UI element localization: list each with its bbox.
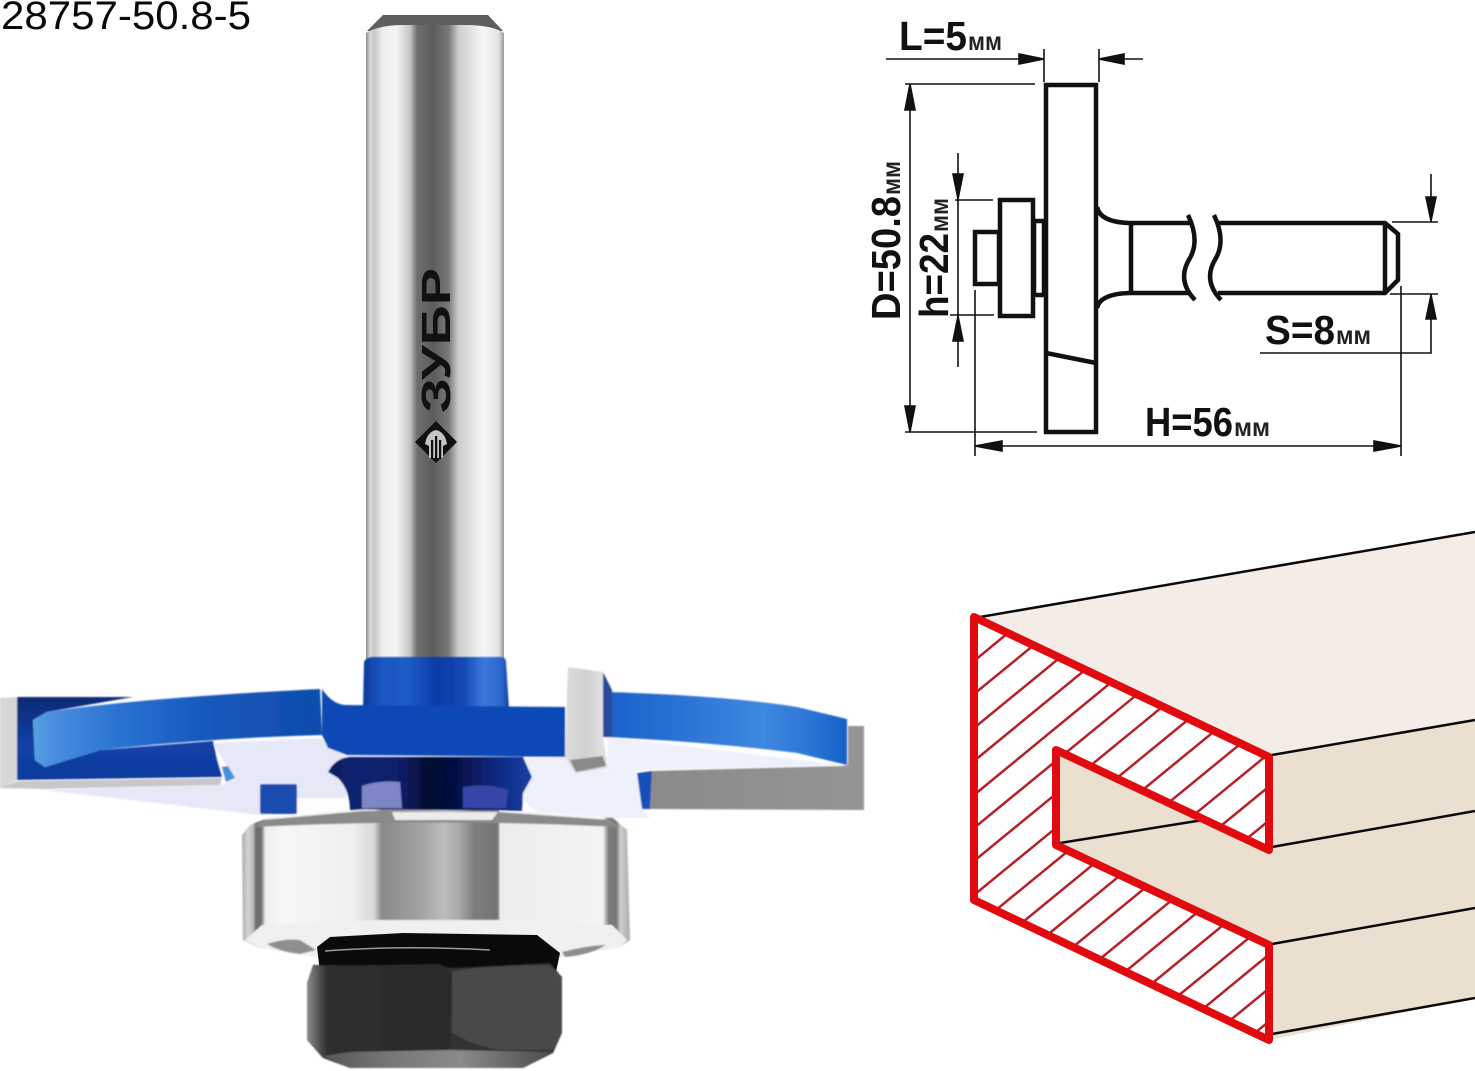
icon: brand emblem (415, 421, 457, 463)
label H: мм (1234, 412, 1270, 442)
label L: мм (968, 26, 1002, 56)
grooved board illustration (974, 532, 1475, 1045)
dimension D (863, 84, 1037, 432)
blue stud (260, 784, 297, 814)
upper tongue side (1269, 720, 1475, 850)
dimension drawing (863, 13, 1438, 456)
brand logo on shank (413, 268, 459, 463)
cutter disk (1046, 85, 1096, 432)
bottom crescents (267, 940, 316, 954)
label h: мм (924, 198, 954, 232)
board edge lines (980, 532, 1475, 1034)
bearing (242, 809, 630, 958)
central blue hub (322, 689, 565, 757)
label S (1265, 307, 1371, 353)
label S: мм (1336, 320, 1371, 350)
hatched profile section (974, 584, 1272, 1045)
label D: D=50.8 (863, 196, 909, 320)
right blue wing (604, 692, 847, 765)
cutter and neck (0, 657, 864, 818)
left blue wing (33, 689, 322, 767)
label L (899, 13, 1002, 59)
label H: H=56 (1145, 399, 1233, 445)
neck highlights (362, 782, 508, 808)
board top face (974, 532, 1475, 757)
label D: мм (876, 161, 906, 195)
lavender underside right (523, 737, 843, 818)
lavender underside left (43, 738, 347, 815)
red profile outline (974, 617, 1269, 1040)
top rim (254, 811, 620, 827)
right face (452, 965, 562, 1050)
white gap (297, 798, 347, 812)
dimension S (1260, 174, 1438, 353)
bottom chamfer (322, 1050, 553, 1068)
router bit photo (0, 15, 864, 1068)
label h: h=22 (911, 233, 957, 318)
collar (363, 657, 509, 708)
hex nut (307, 963, 562, 1068)
label S: S=8 (1265, 307, 1335, 353)
brand name: ЗУБР (413, 268, 459, 413)
lower tongue side (1269, 908, 1475, 1040)
left tooth lower edge (0, 778, 222, 789)
left face (307, 964, 452, 1056)
left facet (222, 766, 235, 782)
dimension H (975, 286, 1401, 456)
right carbide insert (565, 667, 612, 773)
neck (328, 757, 532, 811)
lower white rim (245, 920, 627, 958)
label L: L=5 (899, 13, 967, 59)
groove (1056, 750, 1475, 945)
blue sliver (637, 771, 652, 809)
left tooth dark face (17, 697, 222, 780)
dimension L (886, 13, 1143, 82)
right grey tooth (650, 726, 864, 810)
shank (366, 15, 504, 665)
left carbide tip (0, 697, 17, 788)
shank outline (1097, 207, 1398, 308)
dimension h (911, 153, 994, 367)
washer (317, 933, 560, 972)
bearing outline (975, 200, 1044, 316)
